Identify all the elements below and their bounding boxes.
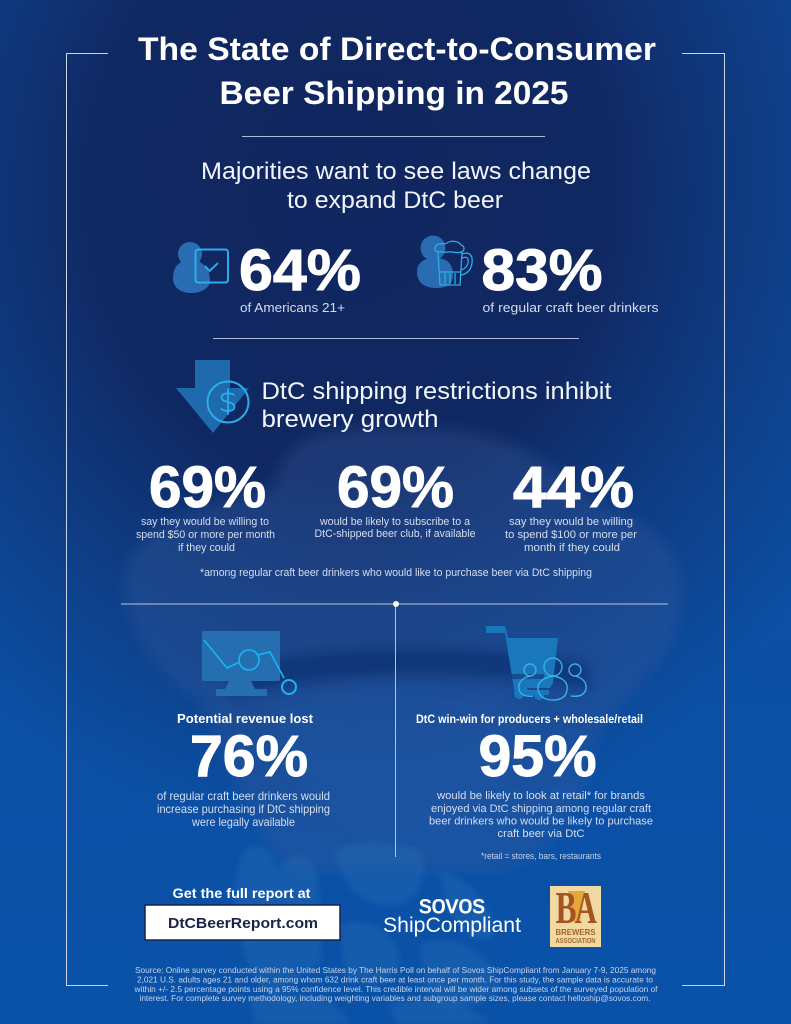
source note: within +/- 2.5 percentage points using a 95% confidence level. This credible interval will be wider among subsets of the surveyed population of xyxy=(134,984,658,994)
stat: 44% spend $100 xyxy=(505,455,637,554)
stat: 64% of Americans: 64% xyxy=(239,238,361,303)
heading: restrictions: DtC shipping restrictions inhibit xyxy=(262,378,612,405)
title xyxy=(138,31,656,111)
stat: 69% subscribe: 69% xyxy=(337,455,454,520)
title: Beer Shipping in 2025 xyxy=(220,75,568,111)
stat: 44% spend $100: 44% xyxy=(513,455,634,520)
stat: 69% spend $50: 69% xyxy=(149,455,266,520)
panel: revenue lost: were legally available xyxy=(191,816,295,829)
stat: 69% spend $50: spend $50 or more per month xyxy=(136,529,275,541)
icon: person with beer mug xyxy=(417,236,472,288)
heading: restrictions xyxy=(176,360,612,433)
stat: 64% of Americans: of Americans 21+ xyxy=(240,301,345,315)
stat: 44% spend $100: to spend $100 or more per xyxy=(505,529,637,541)
button: report URL xyxy=(145,905,340,940)
call to action: Get the full report at xyxy=(172,885,311,901)
source note: Source: Online survey conducted within the United States by The Harris Poll on behalf of Sovos ShipCompliant from January 7-9, 2025 among xyxy=(135,965,656,975)
panel: win-win: craft beer via DtC xyxy=(498,828,584,840)
panel: win-win: *retail = stores, bars, restaurants xyxy=(481,851,602,861)
stat: 83% of craft beer drinkers: 83% xyxy=(482,238,602,303)
divider with node xyxy=(121,601,668,857)
panel: win-win: enjoyed via DtC shipping among regular craft xyxy=(431,803,652,815)
stat: 69% subscribe: DtC-shipped beer club, if available xyxy=(314,528,476,540)
panel: win-win: beer drinkers who would be likely to purchase xyxy=(429,816,653,828)
source note: interest. For complete survey methodology, including weighting variables and subgroup sample sizes, please contact helloship@sovos.com. xyxy=(140,993,650,1003)
logo: Sovos ShipCompliant xyxy=(383,889,521,937)
stat: 44% spend $100: say they would be willing xyxy=(509,516,633,528)
title: The State of Direct-to-Consumer xyxy=(138,31,656,67)
logo: Brewers Association: ASSOCIATION xyxy=(556,938,596,945)
stat: 69% spend $50: say they would be willing to xyxy=(141,516,269,528)
panel: win-win xyxy=(416,626,653,861)
stat: 83% of craft beer drinkers xyxy=(417,236,658,315)
panel: revenue lost: Potential revenue lost xyxy=(177,711,314,726)
logo: Brewers Association: B xyxy=(556,882,576,933)
source note: 2,021 U.S. adults ages 21 and older, among whom 632 drink craft beer at least once per month. For this study, the sample data is accurate to xyxy=(137,974,653,984)
panel: win-win: would be likely to look at retail* for brands xyxy=(436,790,645,802)
panel: revenue lost xyxy=(157,631,330,829)
panel: win-win: 95% xyxy=(478,724,596,789)
logo: Sovos ShipCompliant: sovos xyxy=(419,889,485,919)
panel: win-win: DtC win-win for producers + wholesale/retail xyxy=(416,712,643,726)
frame xyxy=(66,54,724,986)
panel: revenue lost: 76% xyxy=(190,724,308,789)
heading: laws change: to expand DtC beer xyxy=(287,187,503,214)
stat: 69% subscribe: would be likely to subscribe to a xyxy=(319,516,471,528)
stat: 69% spend $50 xyxy=(136,455,275,554)
logo: Sovos ShipCompliant: ShipCompliant xyxy=(383,914,521,937)
icon: down arrow with dollar xyxy=(176,360,249,433)
heading: restrictions: brewery growth xyxy=(262,406,438,433)
call to action xyxy=(145,885,340,940)
logo: Brewers Association: BREWERS xyxy=(556,927,596,937)
stat: 64% of Americans xyxy=(173,238,361,315)
stat: 69% subscribe xyxy=(314,455,476,540)
stat: 83% of craft beer drinkers: of regular craft beer drinkers xyxy=(482,301,658,315)
icon: shopping cart with people xyxy=(486,626,586,700)
panel: revenue lost: of regular craft beer drinkers would xyxy=(157,790,330,803)
stat: 69% spend $50: if they could xyxy=(178,542,235,554)
heading: laws change: Majorities want to see laws change xyxy=(201,158,591,185)
panel: revenue lost: increase purchasing if DtC shipping xyxy=(157,803,330,816)
source note xyxy=(134,965,658,1003)
heading: laws change xyxy=(201,158,591,214)
footnote: DtC purchasers: *among regular craft beer drinkers who would like to purchase beer via DtC shipping xyxy=(200,567,592,579)
button: report URL: DtCBeerReport.com xyxy=(168,915,318,932)
logo: Brewers Association xyxy=(550,882,601,947)
icon: monitor with falling chart xyxy=(202,631,296,696)
stat: 44% spend $100: month if they could xyxy=(524,542,620,554)
logo: Brewers Association: A xyxy=(575,882,597,933)
icon: person with checkbox xyxy=(173,242,228,293)
